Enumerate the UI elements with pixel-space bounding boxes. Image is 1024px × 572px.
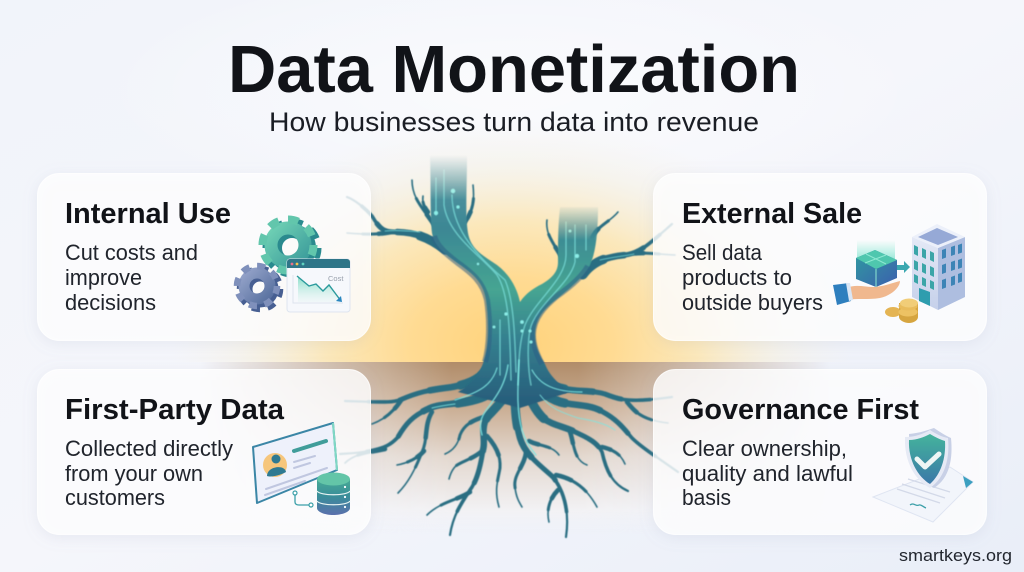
text: internal use description: decisions: [65, 290, 156, 315]
heading: external sale: External Sale: [682, 198, 862, 230]
panel: external sale: [654, 174, 986, 340]
text: governance first description: basis: [682, 485, 731, 510]
icon: arrow: [897, 261, 910, 273]
icon: profile card: [253, 423, 337, 503]
icon: database: [317, 472, 350, 515]
text: governance first description: quality and lawful: [682, 461, 853, 486]
subtitle: How businesses turn data into revenue: [269, 107, 759, 137]
text: external sale description: outside buyers: [682, 290, 823, 315]
tree trunk: [430, 155, 598, 408]
text: internal use description: improve: [65, 265, 142, 290]
text: external sale description: [682, 240, 823, 315]
soil band: [214, 362, 816, 508]
panel: internal use: [38, 174, 370, 340]
text: first-party data description: Collected directly: [65, 436, 233, 461]
icon: office building: [912, 224, 965, 310]
text: governance first description: [682, 436, 853, 510]
icon: shield: [905, 428, 952, 488]
glowing root veins: [385, 231, 634, 455]
icon: connector: [295, 493, 311, 505]
icon: hand: [833, 281, 900, 305]
title: Data Monetization: [228, 32, 800, 107]
text: first-party data description: from your own: [65, 461, 203, 486]
heading: internal use: Internal Use: [65, 198, 231, 230]
text: external sale description: Sell data: [682, 240, 763, 265]
tree illustration: [340, 155, 678, 537]
icon: teal gear: [262, 220, 318, 274]
icon: coins: [885, 298, 918, 323]
text: internal use description: [65, 240, 198, 315]
heading: governance first: Governance First: [682, 394, 919, 426]
panel: first-party data: [38, 370, 370, 534]
text: governance first description: Clear ownership,: [682, 436, 847, 461]
tree roots: [340, 180, 678, 537]
icon: document: [873, 467, 973, 522]
text: first-party data description: customers: [65, 485, 165, 510]
text: external sale description: products to: [682, 265, 792, 290]
panel: governance first: [654, 370, 986, 534]
data lines in trunk: [436, 170, 586, 385]
data nodes in trunk: [434, 189, 579, 344]
icon: data cube in hand, building and coins: [833, 224, 965, 323]
icon: customer profile and database: [253, 423, 350, 515]
icon: gears and cost chart: [237, 220, 350, 312]
icon: blue gear: [237, 266, 280, 309]
source credit: smartkeys.org: [899, 546, 1012, 565]
text: internal use description: Cut costs and: [65, 240, 198, 265]
text: first-party data description: [65, 436, 233, 510]
icon: shield and document: [873, 428, 973, 522]
icon: data cube: [856, 250, 897, 287]
icon: light beam: [857, 240, 895, 262]
sunlight glow behind tree: [170, 118, 854, 362]
heading: first-party data: First-Party Data: [65, 394, 285, 426]
chart label: cost: Cost: [328, 274, 344, 283]
